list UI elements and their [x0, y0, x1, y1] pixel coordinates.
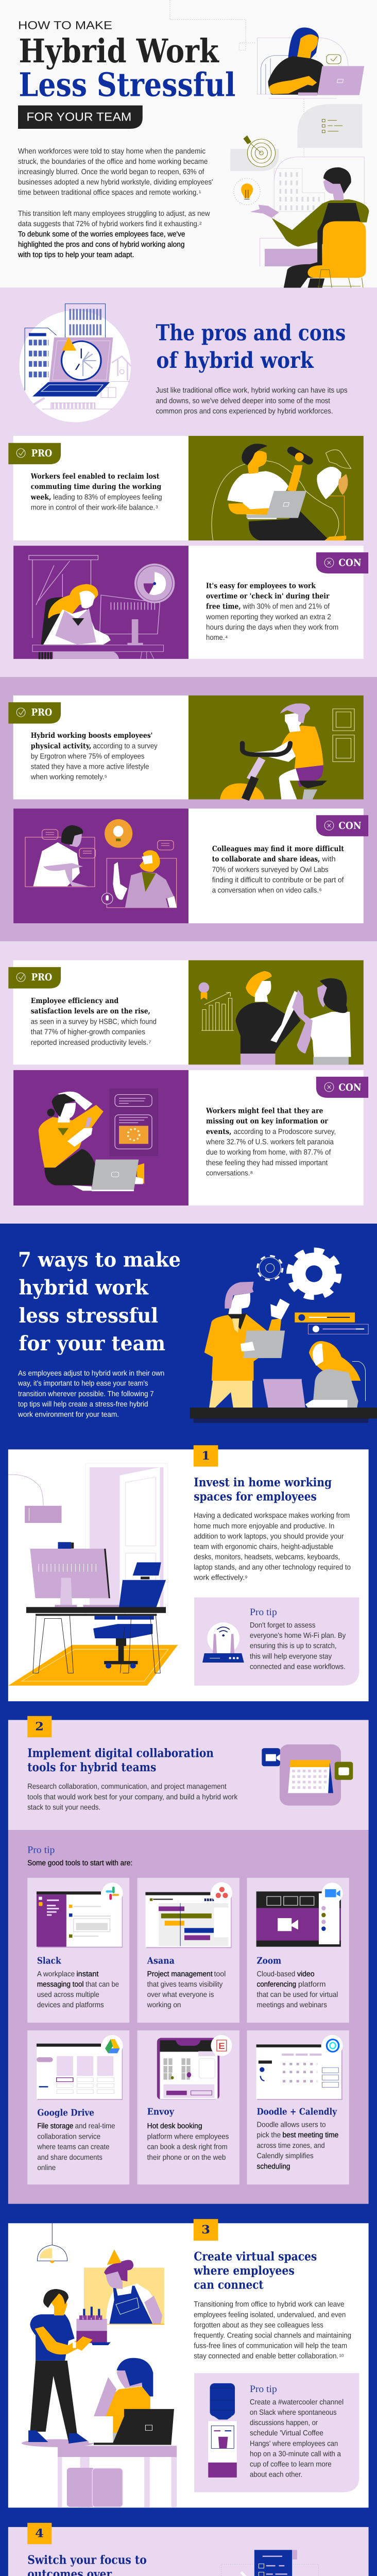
con text: finding it difficult to contribute or be part of [212, 876, 344, 884]
tip heading [194, 2249, 317, 2292]
tool card: Doodle and Calendly: scheduling [257, 2162, 290, 2171]
tip heading: Create virtual spaces [194, 2249, 317, 2263]
con text: with [322, 855, 336, 863]
illustration: gears and team at desk [190, 1251, 377, 1423]
pro text: leading to 83% of employees feeling [53, 493, 162, 501]
pro tag: PRO [31, 448, 52, 459]
pro text: when working remotely. [30, 773, 105, 781]
tool card: Google Drive: online [37, 2163, 56, 2172]
tool card: Envoy: platform where employees [147, 2132, 229, 2141]
con text: free time, [206, 602, 241, 611]
tool card: Slack: Slack [37, 1955, 61, 1966]
con tag: CON [338, 557, 362, 568]
intro paragraph 2: data suggests that 72% of hybrid workers find it exhausting. [18, 219, 199, 228]
con text: due to working from home, with 87.7% of [206, 1148, 331, 1157]
tip text: laptop stands, and any other technology required to [194, 1563, 351, 1571]
icon: light bulb [234, 178, 260, 205]
tip text: frequently. Creating social channels and maintaining [194, 2331, 351, 2340]
tip text: work effectively. [194, 1573, 245, 1582]
pro tip box: discussions happen, or [250, 2418, 318, 2427]
text: 7 ways intro: way, it's important to help ease your team's [18, 1379, 148, 1387]
tool card: Google Drive: collaboration service [37, 2132, 100, 2141]
panel: con 2 collaboration [13, 808, 368, 923]
tip text: Having a dedicated workspace makes working from [194, 1511, 350, 1520]
pro text: Hybrid working boosts employees' [31, 731, 152, 739]
text: pros and cons intro: Just like traditional office work, hybrid working can have its ups [156, 386, 348, 394]
illustration: man at desk [250, 157, 369, 287]
con tag: CON [338, 1082, 362, 1093]
pro tip box [194, 2373, 359, 2492]
tip text [194, 1511, 351, 1582]
tip heading [27, 1746, 214, 1774]
intro: heading and paragraphs [18, 0, 369, 287]
tip text: forgotten about as they see colleagues less [194, 2321, 323, 2329]
heading: 7 ways: 7 ways to make [18, 1248, 181, 1272]
icon: calendar with video and chat [262, 1744, 353, 1806]
pro text: Workers feel enabled to reclaim lost [30, 472, 160, 480]
text: pros and cons intro [156, 386, 348, 415]
pro text: Employee efficiency and [31, 996, 118, 1005]
tip text [194, 2300, 351, 2360]
pro tip intro: Some good tools to start with are: [27, 1859, 132, 1867]
tip heading [27, 2552, 147, 2576]
intro paragraph 2: highlighted the pros and cons of hybrid working along [18, 240, 185, 248]
intro paragraph 1: businesses adopted a new hybrid workstyle, dividing employees' [18, 178, 213, 186]
pro text [31, 996, 157, 1046]
illustration: colleagues high five [199, 971, 351, 1064]
con text: 6 [319, 888, 322, 892]
heading: 7 ways: less stressful [19, 1303, 158, 1327]
panel: con 3 missing out [13, 1070, 368, 1206]
tip heading: Implement digital collaboration [27, 1746, 214, 1760]
intro paragraph 2: 2 [199, 221, 202, 226]
tip text: Transitioning from office to hybrid work can leave [194, 2300, 344, 2309]
con tag [316, 552, 368, 573]
pro text: week, [30, 493, 51, 501]
con text: Colleagues may find it more difficult [212, 844, 344, 853]
pro tag [8, 702, 61, 724]
illustration: laptop with clock between office and home [19, 304, 131, 422]
con text: with 30% of men and 21% of [243, 602, 330, 611]
pro text: physical activity, [31, 741, 91, 750]
card: tip 3 virtual spaces [8, 2219, 369, 2507]
intro paragraph 1: When workforces were told to stay home when the pandemic [18, 147, 205, 155]
tip heading: tools for hybrid teams [27, 1760, 156, 1774]
tool card: Doodle and Calendly: best meeting time [282, 2131, 338, 2139]
illustration: virtual birthday celebration [22, 2223, 177, 2507]
text: 7 ways intro [18, 1369, 164, 1419]
con text: to collaborate and share ideas, [212, 855, 320, 863]
tool card: Zoom: Zoom [257, 1955, 281, 1966]
con text: these feeling they had missed important [206, 1158, 328, 1167]
card: tip 4 outcomes [8, 2523, 369, 2576]
tool card: Asana: Project management [147, 1970, 213, 1978]
con text: according to a Prodoscore survey, [234, 1127, 336, 1136]
tool card: Envoy [138, 2030, 239, 2184]
tip text: desks, monitors, headsets, webcams, keyboards, [194, 1553, 340, 1561]
panel: con 1 overtime [13, 546, 368, 659]
card: tip 1 home working spaces [8, 1445, 369, 1701]
tip text: addition to work laptops, you should provide your [194, 1532, 344, 1540]
icon: checklist card [297, 104, 362, 148]
pro tag: PRO [31, 972, 52, 983]
pro tip box [194, 1597, 359, 1686]
intro paragraph 2: This transition left many employees struggling to adjust, as new [18, 209, 210, 217]
con text: overtime or 'check in' during their [206, 591, 330, 600]
pretitle: HOW TO MAKE [18, 19, 112, 32]
intro paragraph 1: struck, the boundaries of the office and home working became [18, 157, 208, 165]
tool card: Asana: that gives teams visibility [147, 1980, 222, 1988]
tip text: team with ergonomic chairs, height-adjustable [194, 1543, 333, 1551]
heading: 7 ways: for your team [19, 1331, 165, 1355]
tool card: Google Drive: Google Drive [37, 2108, 94, 2118]
tool card: Google Drive: where teams can create [37, 2143, 109, 2151]
tool card: Slack: instant [76, 1970, 99, 1978]
tool card: Zoom: platform [298, 1980, 326, 1988]
illustration: tired woman at desk with clock [29, 555, 175, 659]
text: 7 ways intro: top tips will help create a stress-free hybrid [18, 1400, 148, 1408]
tip text: Research collaboration, communication, and project management [27, 1782, 227, 1791]
tip heading: spaces for employees [194, 1489, 317, 1503]
illustration: worried woman with phone and laptop [39, 1089, 158, 1191]
con text: women reporting they worked an extra 2 [206, 613, 331, 621]
intro paragraph 1: increasingly blurred. Once the world began to reopen, 63% of [18, 167, 204, 176]
tool card: Google Drive: and share documents [37, 2153, 102, 2161]
tool card: Slack: messaging tool [37, 1980, 83, 1988]
tool card: Asana: working on [147, 2001, 181, 2009]
tool card: Envoy: E [218, 2041, 225, 2051]
pro tag [8, 967, 61, 989]
number badge [194, 2219, 218, 2241]
number badge: 2 [35, 1720, 44, 1733]
tool card: Doodle and Calendly: across time zones, and [257, 2141, 325, 2150]
heading: pros and cons: of hybrid work [156, 347, 314, 373]
number badge [27, 2523, 52, 2544]
tool card: Doodle and Calendly: Doodle + Calendly [257, 2106, 337, 2117]
illustration: home office desk [8, 1463, 178, 1686]
pro text: more in control of their work-life balance. [31, 503, 155, 512]
tool card: Zoom: conferencing [257, 1980, 296, 1988]
con tag [316, 815, 368, 836]
tip heading [194, 1475, 332, 1503]
pro text: 5 [105, 774, 107, 778]
tip text: 9 [245, 1575, 247, 1579]
pro text: according to a survey [93, 742, 158, 750]
pro tip box: Don't forget to assess [250, 1621, 315, 1629]
tool card: Slack: devices and platforms [37, 2001, 104, 2009]
illustration: woman at laptop [170, 0, 364, 158]
tool card: Zoom: Cloud-based [257, 1970, 295, 1978]
tool card: Asana: over what everyone is [147, 1990, 214, 1998]
subtitle banner: FOR YOUR TEAM [26, 110, 131, 124]
pro text: by Ergotron where 75% of employees [31, 752, 145, 760]
icon: target [230, 135, 279, 171]
pro tag [8, 443, 61, 464]
pro text: 3 [156, 505, 158, 509]
con tag: CON [338, 820, 362, 832]
tool card: Google Drive: and real-time [75, 2122, 115, 2130]
con text: events, [206, 1127, 232, 1136]
con text: where 32.7% of U.S. workers felt paranoia [206, 1138, 334, 1146]
number badge: 3 [201, 2223, 210, 2236]
tool card: Envoy: their phone or on the web [147, 2153, 226, 2161]
text: 7 ways intro: transition wherever possible. The following 7 [18, 1389, 154, 1398]
number badge: 4 [35, 2527, 44, 2540]
section: 7 ways heading [18, 1248, 377, 1423]
pro text: commuting time during the working [31, 482, 161, 490]
intro paragraph 1: time between traditional office spaces and remote working. [18, 188, 198, 197]
pro tip box: ensuring this is up to scratch, [250, 1641, 337, 1650]
tip heading: where employees [194, 2263, 295, 2277]
heading: pros and cons [156, 319, 346, 373]
illustration: man exercising with laptop [212, 444, 351, 540]
icon: water cooler [208, 2383, 237, 2478]
tip text: tools that would work best for your company, and build a hybrid work [27, 1792, 238, 1801]
pro tip box: Pro tip [250, 2383, 277, 2394]
pro tip box: schedule 'Virtual Coffee [250, 2429, 323, 2437]
tip text: fuss-free lines of communication will help the team [194, 2342, 347, 2350]
tool card: Zoom: video [297, 1970, 315, 1978]
tool card: Zoom: meetings and webinars [257, 2001, 327, 2009]
tip text: employees feeling isolated, undervalued, and even [194, 2310, 346, 2319]
con text: It's easy for employees to work [206, 581, 316, 590]
con text: 8 [250, 1171, 253, 1175]
con text [206, 581, 338, 642]
pro text: as seen in a survey by HSBC, which found [31, 1018, 157, 1026]
pro text: satisfaction levels are on the rise, [31, 1007, 150, 1015]
pro tip box: about each other. [250, 2470, 302, 2479]
tool card: Envoy: can book a desk right from [147, 2143, 228, 2151]
section: pros and cons header [8, 304, 364, 540]
pro tip box: connected and ease workflows. [250, 1663, 346, 1671]
tool card: Slack [27, 1878, 129, 2023]
con text [212, 844, 344, 894]
pro tip box: hop on a 30-minute call with a [250, 2450, 341, 2458]
pro tip box: on Slack where spontaneous [250, 2408, 337, 2416]
heading: 7 ways [18, 1248, 181, 1355]
pro text [30, 472, 162, 512]
tool card: Slack: used across multiple [37, 1990, 99, 1998]
tool card: Google Drive: File storage [37, 2122, 73, 2130]
con text [206, 1106, 336, 1177]
tip text: home much more enjoyable and productive. In [194, 1521, 334, 1530]
tip heading: Switch your focus to [27, 2552, 147, 2567]
pro tip box: cup of coffee to learn more [250, 2460, 332, 2468]
pro tip box: Hangs' where employees can [250, 2439, 338, 2448]
pro text: 7 [148, 1040, 151, 1044]
tool card: Doodle and Calendly: pick the [257, 2131, 281, 2139]
con tag [316, 1077, 368, 1098]
tool card: Slack: A workplace [37, 1970, 75, 1978]
heading: 7 ways: hybrid work [19, 1276, 149, 1299]
illustration: video call colleagues [25, 819, 177, 908]
con text: 70% of workers surveyed by Owl Labs [212, 866, 329, 874]
panel: pro 2 physical activity [8, 696, 364, 800]
tip text: stay connected and enable better collaboration. [194, 2352, 338, 2360]
number badge [27, 1716, 52, 1737]
con text: home. [206, 633, 225, 642]
pro tip intro: Pro tip [27, 1844, 55, 1855]
con text: a conversation when on video calls. [212, 886, 319, 894]
tool card: Envoy: Hot desk booking [147, 2122, 202, 2130]
pro tip box: everyone's home Wi-Fi plan. By [250, 1631, 346, 1640]
tip text: stack to suit your needs. [27, 1803, 100, 1811]
title line 2: Less Stressful [19, 65, 235, 104]
tool card: Google Drive [27, 2030, 129, 2184]
card: tip 2 collaboration tools [8, 1716, 369, 2204]
intro paragraph 2: with top tips to help your team adapt. [18, 250, 134, 259]
pro tip box: this will help everyone stay [250, 1652, 332, 1660]
panel: pro 1 commuting [8, 436, 364, 540]
tool card: Doodle and Calendly [247, 2030, 349, 2184]
con text: missing out on key information or [206, 1116, 328, 1125]
tool card: Zoom: that can be used for virtual [257, 1990, 338, 1998]
intro paragraph 2 [18, 209, 210, 259]
intro paragraph 2: To debunk some of the worries employees face, we've [18, 230, 185, 238]
tool card: Asana [138, 1878, 239, 2023]
pro tip box: Pro tip [250, 1606, 277, 1617]
tool card: Zoom [247, 1878, 349, 2023]
title line 1: Hybrid Work [19, 32, 219, 70]
intro paragraph 1: 1 [199, 190, 201, 194]
pro tag: PRO [31, 707, 52, 718]
tool card: Envoy: Envoy [147, 2106, 174, 2117]
tip text: 10 [339, 2353, 344, 2358]
pro text [30, 731, 158, 781]
text: pros and cons intro: and downs, so we've delved deeper into some of the most [156, 397, 330, 405]
tool card: Doodle and Calendly: Calendly simplifies [257, 2151, 314, 2160]
tool card: Doodle and Calendly: Doodle allows users to [257, 2121, 326, 2129]
pro text: that 77% of higher-growth companies [31, 1028, 145, 1036]
text: 7 ways intro: work environment for your team. [18, 1410, 119, 1419]
pro tip box: Create a #watercooler channel [250, 2398, 344, 2406]
number badge: 1 [201, 1449, 210, 1463]
illustration: woman on exercise bike [220, 703, 354, 800]
tool card: Asana: Asana [147, 1955, 175, 1966]
icon: router [202, 1622, 244, 1663]
panel: pro 3 productivity [8, 960, 364, 1064]
pro tip intro [27, 1844, 132, 1867]
pro text: reported increased productivity levels. [31, 1038, 148, 1046]
text: pros and cons intro: common pros and cons experienced by hybrid workforces. [156, 407, 333, 415]
tool card: Slack: that can be [85, 1980, 119, 1988]
tip text [27, 1782, 238, 1811]
con text: conversations. [206, 1169, 250, 1177]
tip heading: can connect [194, 2278, 264, 2292]
subtitle banner [18, 106, 143, 129]
con text: 4 [225, 635, 228, 639]
tip heading: Invest in home working [194, 1475, 332, 1489]
illustration: handshake and checklist [191, 2550, 351, 2576]
intro paragraph 1 [18, 147, 213, 197]
con text: Workers might feel that they are [206, 1106, 323, 1115]
text: 7 ways intro: As employees adjust to hybrid work in their own [18, 1369, 164, 1377]
number badge [194, 1445, 218, 1467]
con text: hours during the days when they work from [206, 623, 338, 631]
pro text: stated they have a more active lifestyle [31, 762, 149, 771]
tool card: Asana: tool [214, 1970, 226, 1978]
